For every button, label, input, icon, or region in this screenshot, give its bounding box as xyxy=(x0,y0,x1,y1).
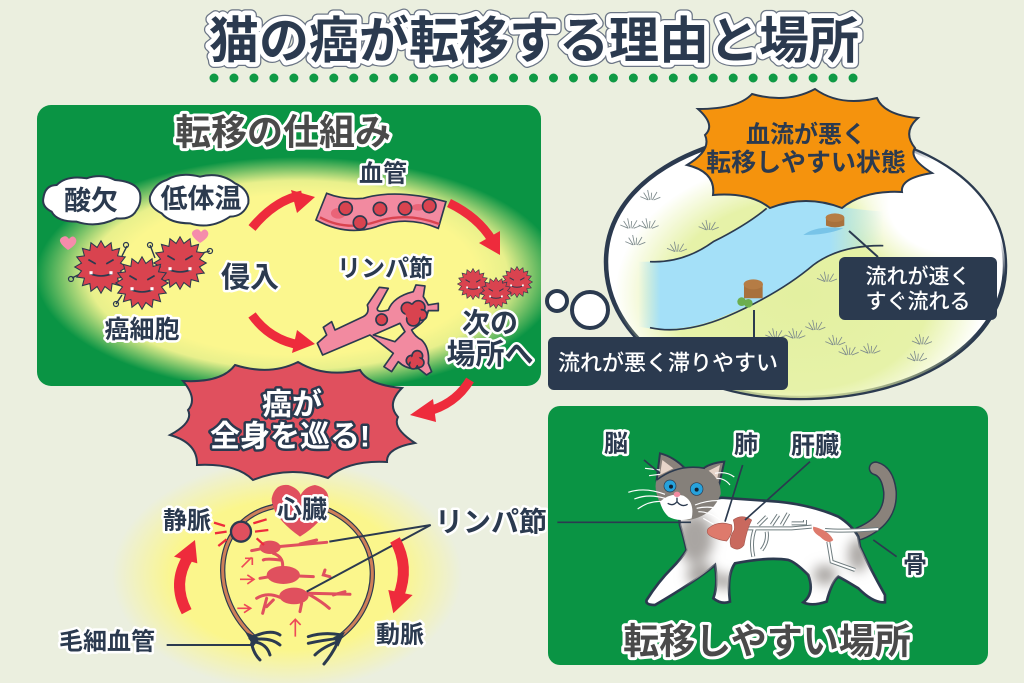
body shading xyxy=(677,513,868,589)
eyes and nose xyxy=(664,480,676,492)
label: to next place xyxy=(446,308,534,371)
label: artery: 動脈 xyxy=(376,622,424,648)
glow: circulation xyxy=(112,460,462,683)
burst: poor blood flow xyxy=(687,89,932,208)
burst: poor blood flow: 血流が悪く xyxy=(746,120,866,148)
cloud: low body temperature: 低体温 xyxy=(160,184,242,214)
label: lymph node: リンパ節 xyxy=(337,256,433,282)
river xyxy=(638,199,883,329)
ears xyxy=(657,453,685,480)
thought bubble circles xyxy=(547,291,608,328)
burst: cancer travels whole body: 全身を巡る! xyxy=(210,420,370,454)
label: lung: 肺 xyxy=(734,432,758,458)
label: brain: 脳 xyxy=(604,430,628,458)
emphasis marks xyxy=(214,519,268,546)
arrow: to blood vessel xyxy=(252,190,315,228)
label: vein: 静脈 xyxy=(163,508,211,534)
burst: poor blood flow: 転移しやすい状態 xyxy=(706,149,906,177)
callout: poor flow: 流れが悪く滞りやすい xyxy=(558,350,778,376)
label: to next place: 次の xyxy=(462,308,518,338)
stump: upper xyxy=(803,213,844,235)
cloud: low oxygen: 酸欠 xyxy=(64,186,118,216)
label: capillaries: 毛細血管 xyxy=(59,628,155,656)
cancer cells xyxy=(60,229,212,309)
label: heart: 心臓 xyxy=(277,496,327,524)
label: bone: 骨 xyxy=(903,552,927,578)
callout: fast flow: 流れが速く xyxy=(866,266,970,288)
heading: how metastasis works: 転移の仕組み xyxy=(175,112,391,152)
stump: lower xyxy=(737,279,763,308)
lymph vessels xyxy=(317,285,438,375)
organs xyxy=(707,523,732,541)
cloud: low body temperature xyxy=(150,175,248,226)
label: invasion: 侵入 xyxy=(221,261,279,294)
tail xyxy=(860,468,890,533)
title: 猫の癌が転移する理由と場所 xyxy=(209,13,859,69)
callout: poor flow xyxy=(548,337,788,390)
arrow: from vessel onward xyxy=(449,203,500,255)
panel: mechanism of metastasis xyxy=(36,105,560,393)
heart xyxy=(272,485,328,537)
burst: cancer travels whole body: 癌が xyxy=(262,388,322,422)
head xyxy=(656,467,721,520)
capillaries xyxy=(250,632,342,664)
callout: fast flow: すぐ流れる xyxy=(866,290,970,314)
lymph nodes xyxy=(252,540,350,613)
arrow: to lymph node xyxy=(252,315,315,353)
small cancer cells xyxy=(458,266,532,308)
tumour on vein xyxy=(231,522,251,542)
label: to next place: 場所へ xyxy=(446,338,534,371)
arrow: artery xyxy=(395,540,403,597)
panel: thought bubble with river xyxy=(604,146,1008,400)
label: lymph node: リンパ節 xyxy=(435,506,547,538)
lines to lymph label xyxy=(307,525,431,592)
grass xyxy=(620,190,932,361)
body xyxy=(646,498,885,605)
label: blood vessel: 血管 xyxy=(359,160,407,188)
pointer lines xyxy=(557,460,897,557)
circulation diagram xyxy=(167,485,431,664)
burst: cancer travels whole body xyxy=(170,362,415,480)
meadow xyxy=(618,182,976,398)
title: 猫の癌が転移する理由と場所 xyxy=(209,13,859,69)
label: liver: 肝臓 xyxy=(791,432,839,460)
whiskers xyxy=(628,468,734,525)
arrow: to whole body xyxy=(410,380,470,422)
blood vessel xyxy=(316,193,446,230)
pointer lines xyxy=(754,231,878,337)
blood circle xyxy=(223,507,372,637)
dotted title underline xyxy=(214,74,856,82)
cloud: low oxygen xyxy=(43,176,140,224)
panel: where metastasis occurs xyxy=(548,406,988,665)
heading: common metastasis sites: 転移しやすい場所 xyxy=(623,620,911,662)
callout: fast flow xyxy=(839,257,997,320)
cat illustration xyxy=(557,453,897,605)
yellow glow xyxy=(36,157,560,393)
skeleton xyxy=(747,513,878,570)
small arrows xyxy=(237,557,301,637)
label: cancer cells: 癌細胞 xyxy=(104,316,180,344)
hearts xyxy=(60,236,76,250)
arrow: vein xyxy=(180,557,188,612)
